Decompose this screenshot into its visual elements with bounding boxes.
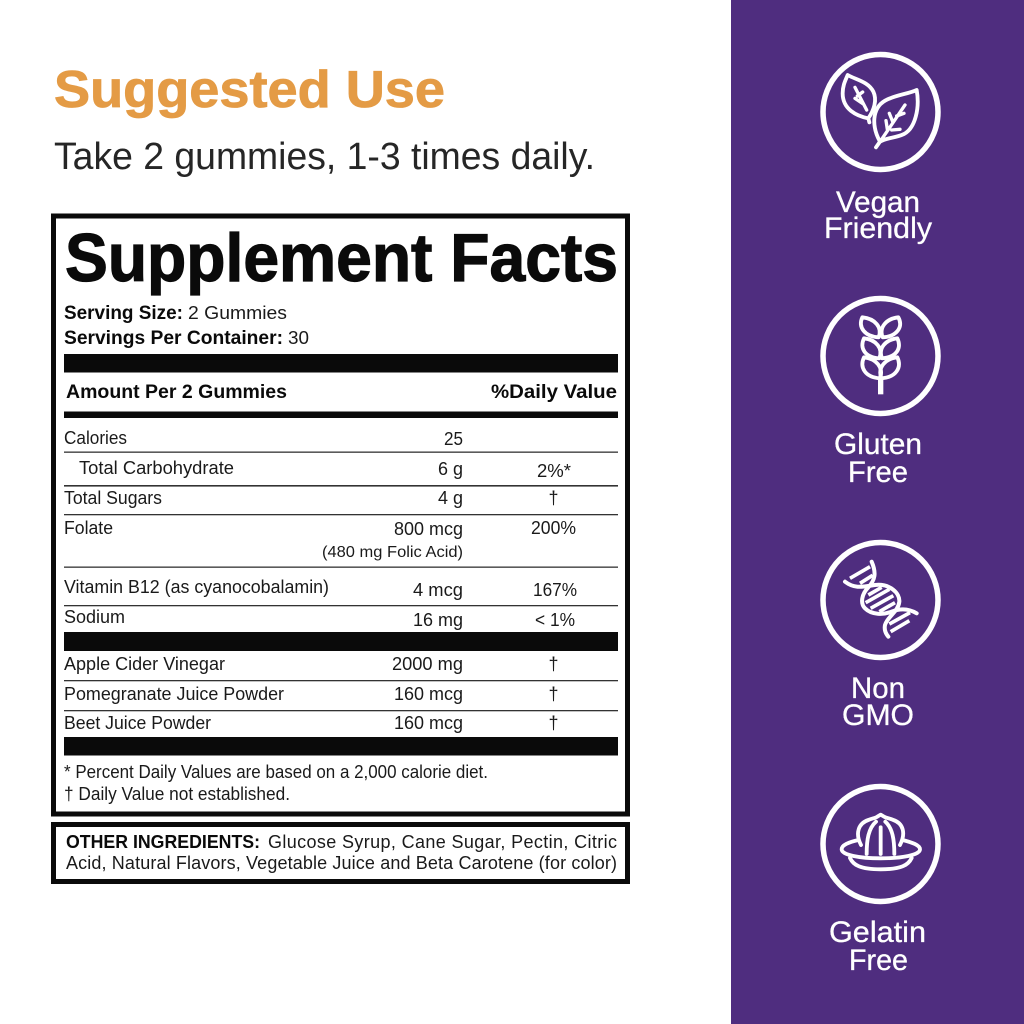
claim: gelatin free [823, 786, 938, 977]
icon: wheat [823, 298, 938, 414]
serving size: Serving Size: [64, 303, 183, 324]
row: sodium [64, 607, 575, 630]
row: calories: 25 [444, 429, 463, 449]
footnotes [64, 762, 488, 804]
row: folate: Folate [64, 518, 113, 538]
row: vitamin b12: 4 mcg [413, 580, 463, 600]
row: calories: Calories [64, 428, 127, 448]
row: pomegranate juice powder: Pomegranate Juice Powder [64, 684, 284, 704]
icon: gelatin mold [823, 786, 938, 902]
row: calories [64, 428, 463, 449]
row: folate: 800 mcg [394, 519, 463, 539]
row: beet juice powder [64, 713, 559, 733]
panel: product claims sidebar [731, 0, 1024, 1024]
label: vegan friendly: Vegan [836, 186, 920, 219]
row: vitamin b12: 167% [533, 580, 577, 600]
label: non gmo: GMO [842, 699, 914, 732]
row: vitamin b12: Vitamin B12 (as cyanocobalamin) [64, 577, 329, 597]
title: supplement facts: Supplement Facts [65, 220, 618, 296]
row: total sugars [64, 488, 559, 508]
serving size: 2 Gummies [188, 303, 287, 323]
claim: gluten free [823, 298, 938, 489]
row: beet juice powder: † [548, 713, 559, 733]
row: vitamin b12 [64, 577, 577, 600]
label: non gmo: Non [851, 672, 905, 705]
row: pomegranate juice powder: † [548, 684, 559, 704]
row: apple cider vinegar [64, 654, 559, 674]
label: gelatin free [829, 916, 926, 977]
servings per container: 30 [288, 328, 309, 348]
row: total carbohydrate [79, 458, 571, 481]
icon: vegan leaves [823, 54, 938, 170]
icon: dna helix [823, 542, 938, 658]
row: sodium: < 1% [535, 610, 575, 630]
row: total carbohydrate: Total Carbohydrate [79, 458, 234, 478]
panel: supplement facts [54, 216, 628, 814]
panel: other ingredients: OTHER INGREDIENTS: [66, 832, 260, 852]
claim: non gmo [823, 542, 938, 732]
label: gelatin free: Free [849, 944, 908, 977]
label: vegan friendly: Friendly [824, 212, 932, 245]
column heading: amount per 2 gummies: Amount Per 2 Gummies [66, 382, 287, 403]
panel: other ingredients: Acid, Natural Flavors, Vegetable Juice and Beta Carotene (for color) [66, 853, 617, 873]
heading: suggested use: Suggested Use [54, 61, 445, 119]
label: gluten free: Gluten [834, 428, 922, 461]
row: apple cider vinegar: † [548, 654, 559, 674]
claim: vegan friendly [823, 54, 938, 245]
row: total sugars: Total Sugars [64, 488, 162, 508]
label: vegan friendly [824, 186, 932, 245]
row: folate [64, 518, 576, 561]
label: non gmo [842, 672, 914, 732]
row: pomegranate juice powder [64, 684, 559, 704]
row: folate: (480 mg Folic Acid) [322, 544, 463, 561]
row: folate: 200% [531, 518, 576, 538]
servings per container: Servings Per Container: [64, 328, 283, 349]
row: sodium: Sodium [64, 607, 125, 627]
row: apple cider vinegar: 2000 mg [392, 654, 463, 674]
row: pomegranate juice powder: 160 mcg [394, 684, 463, 704]
label: gluten free [834, 428, 922, 489]
column heading: daily value: %Daily Value [491, 382, 617, 403]
panel: other ingredients: Glucose Syrup, Cane Sugar, Pectin, Citric [268, 832, 617, 852]
label: gelatin free: Gelatin [829, 916, 926, 949]
row: total carbohydrate: 2%* [537, 461, 571, 481]
row: apple cider vinegar: Apple Cider Vinegar [64, 654, 225, 674]
row: sodium: 16 mg [413, 610, 463, 630]
row: total sugars: † [548, 488, 559, 508]
label: gluten free: Free [848, 456, 908, 489]
footnotes: * Percent Daily Values are based on a 2,000 calorie diet. [64, 762, 488, 782]
row: beet juice powder: 160 mcg [394, 713, 463, 733]
footnotes: † Daily Value not established. [64, 784, 290, 804]
serving size [64, 303, 287, 324]
row: total carbohydrate: 6 g [438, 459, 463, 479]
row: total sugars: 4 g [438, 488, 463, 508]
panel: other ingredients [54, 824, 628, 882]
text: dosage instruction: Take 2 gummies, 1-3 times daily. [54, 136, 595, 178]
row: beet juice powder: Beet Juice Powder [64, 713, 211, 733]
